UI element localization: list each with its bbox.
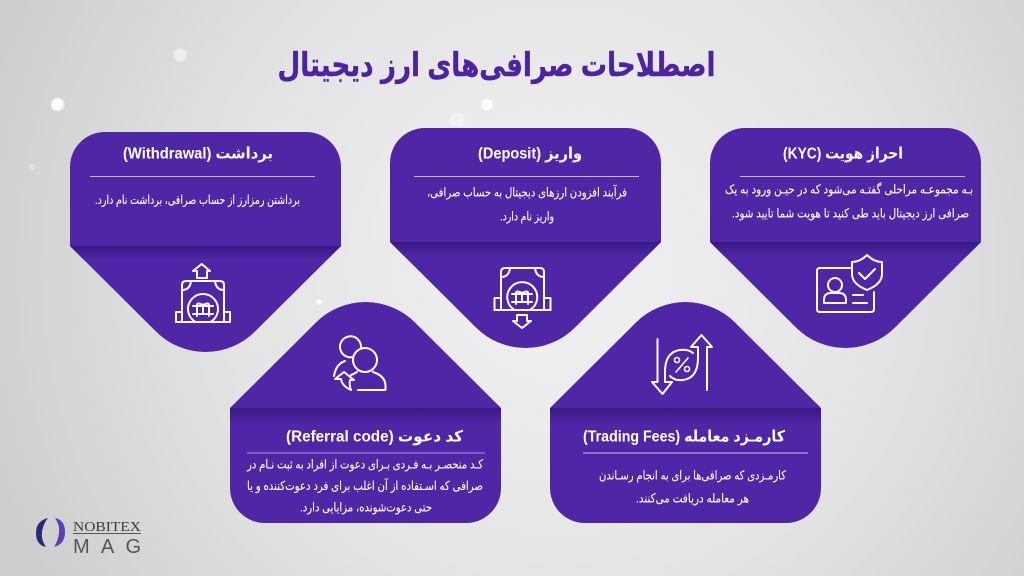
text: Referral description [246,458,483,516]
heading: Referral code: کد دعوت (Referral code) [286,428,464,446]
decorative bubbles [28,48,493,304]
panel: Withdrawal [70,132,341,352]
text: KYC description: صرافی ارز دیجیتال باید طی کنید تا هویت شما تایید شود. [732,206,969,222]
logo: Nobitex Mag [36,518,141,558]
text: Deposit description: فرآیند افزودن ارزهای دیجیتال به حساب صرافی، [427,184,627,200]
title: اصطلاحات صرافی‌های ارز دیجیتال [278,46,716,85]
icon: deposit safe with down arrow [494,268,550,328]
panel: Deposit [390,128,661,348]
icon: withdrawal safe with up arrow [176,264,230,322]
text: Referral description: صرافی که اسـتفاده از آن اغلب برای فرد دعوت‌کننده و یا [247,478,483,494]
text: Deposit description [427,184,627,224]
text: Deposit description: واریز نام دارد. [500,210,554,224]
heading: KYC: احراز هویت (KYC) [783,146,903,162]
text: Trading Fees description: هر معامله دریافت می‌کنند. [636,492,749,506]
icon: identity card with shield [817,255,882,312]
panel: KYC [710,128,981,348]
panel: Trading Fees [550,302,821,523]
text: KYC description [725,182,973,222]
icon: fee exchange arrows with percent [652,335,712,394]
text: Referral description: حتی دعوت‌شونده، مزایایی دارد. [300,500,432,516]
text: Trading Fees description [599,468,786,506]
heading: Trading Fees: کارمـزد معامله (Trading Fees) [583,428,786,446]
logo mark [36,518,65,547]
text: Trading Fees description: کارمـزدی که صرافی‌ها برای به انجام رسـاندن [599,468,786,484]
text: Withdrawal description: برداشتن رمزارز از حساب صرافی، برداشت نام دارد. [95,193,300,208]
heading: Withdrawal: برداشت (Withdrawal) [123,146,273,162]
panel: Referral code [230,302,501,523]
text: KYC description: بـه مجموعـه مراحلی گفتـه می‌شود که در حیـن ورود به یک [725,182,973,198]
logo wordmark: NOBITEX [73,520,141,535]
icon: referred users [334,336,386,390]
logo: Nobitex Mag: MAG [73,536,141,558]
text: Referral description: کـد منحصـر بـه فـردی بـرای دعوت از افراد به ثبت نـام در [246,458,483,472]
heading: Deposit: واریز (Deposit) [478,146,582,162]
